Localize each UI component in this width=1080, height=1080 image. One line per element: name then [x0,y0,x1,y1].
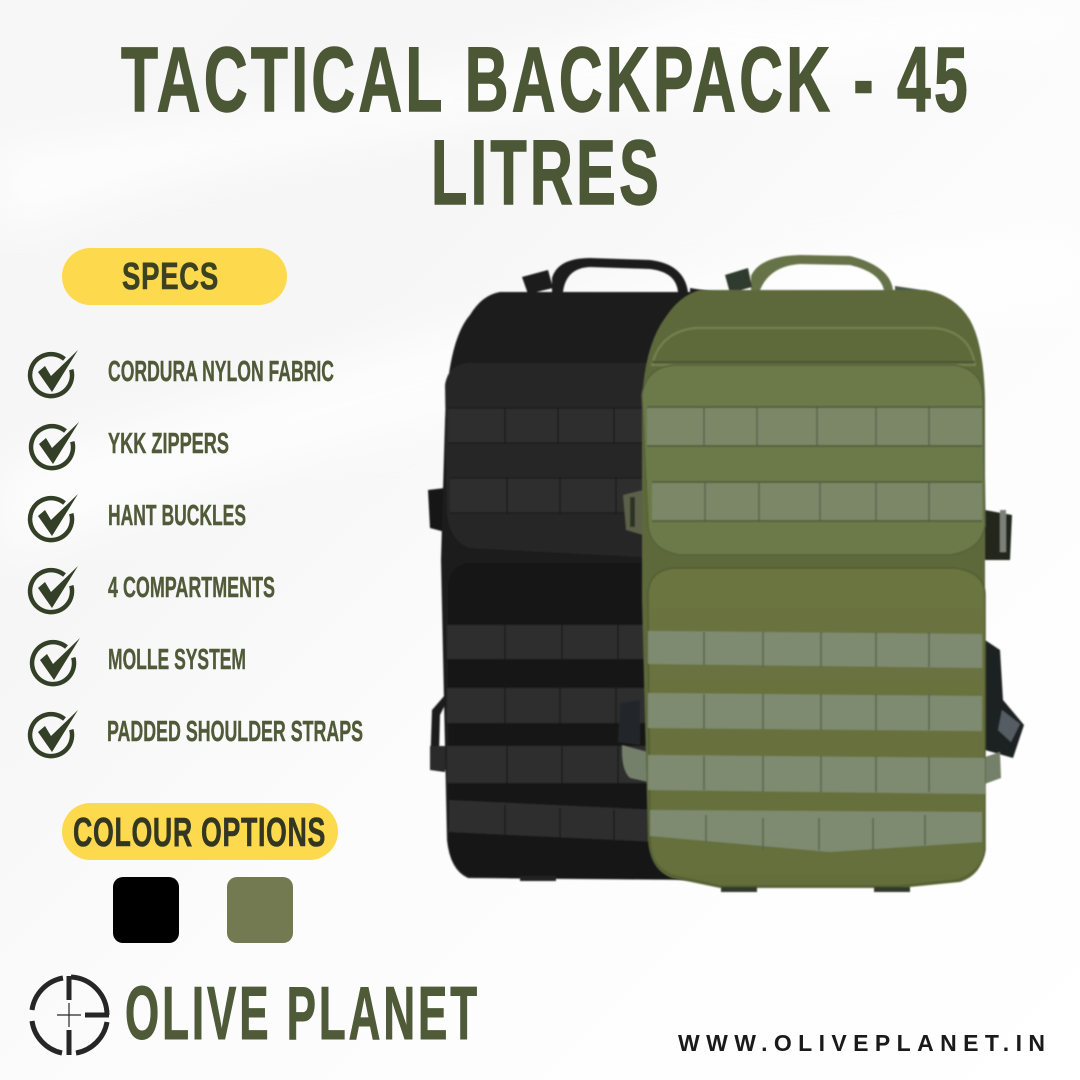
black backpack [428,258,716,881]
specs heading pill: SPECS [122,256,219,298]
spec item: padded shoulder straps [30,710,363,756]
spec item: molle system [32,638,246,684]
olive backpack [618,255,1024,892]
brand name: OLIVE PLANET [125,971,480,1055]
spec item: ykk zippers: YKK ZIPPERS [108,428,229,460]
website url: WWW.OLIVEPLANET.IN [678,1030,1045,1056]
spec item: hant buckles: HANT BUCKLES [108,500,246,532]
title: LITRES [431,122,662,224]
title [121,29,971,224]
spec item: cordura nylon fabric [30,350,334,396]
specs list [30,350,363,756]
colour options heading pill: COLOUR OPTIONS [73,809,326,855]
colour options heading pill [62,803,338,860]
logo icon: crosshair [32,976,109,1055]
colour swatch: black [113,877,179,943]
spec item: 4 compartments: 4 COMPARTMENTS [108,572,275,604]
spec item: 4 compartments [30,566,275,612]
spec item: padded shoulder straps: PADDED SHOULDER STRAPS [107,716,363,748]
spec item: molle system: MOLLE SYSTEM [108,644,246,676]
spec item: ykk zippers [31,422,229,468]
spec item: hant buckles [30,494,246,540]
colour swatch: olive [227,877,293,943]
specs heading pill [62,248,287,305]
spec item: cordura nylon fabric: CORDURA NYLON FABRIC [108,356,334,388]
